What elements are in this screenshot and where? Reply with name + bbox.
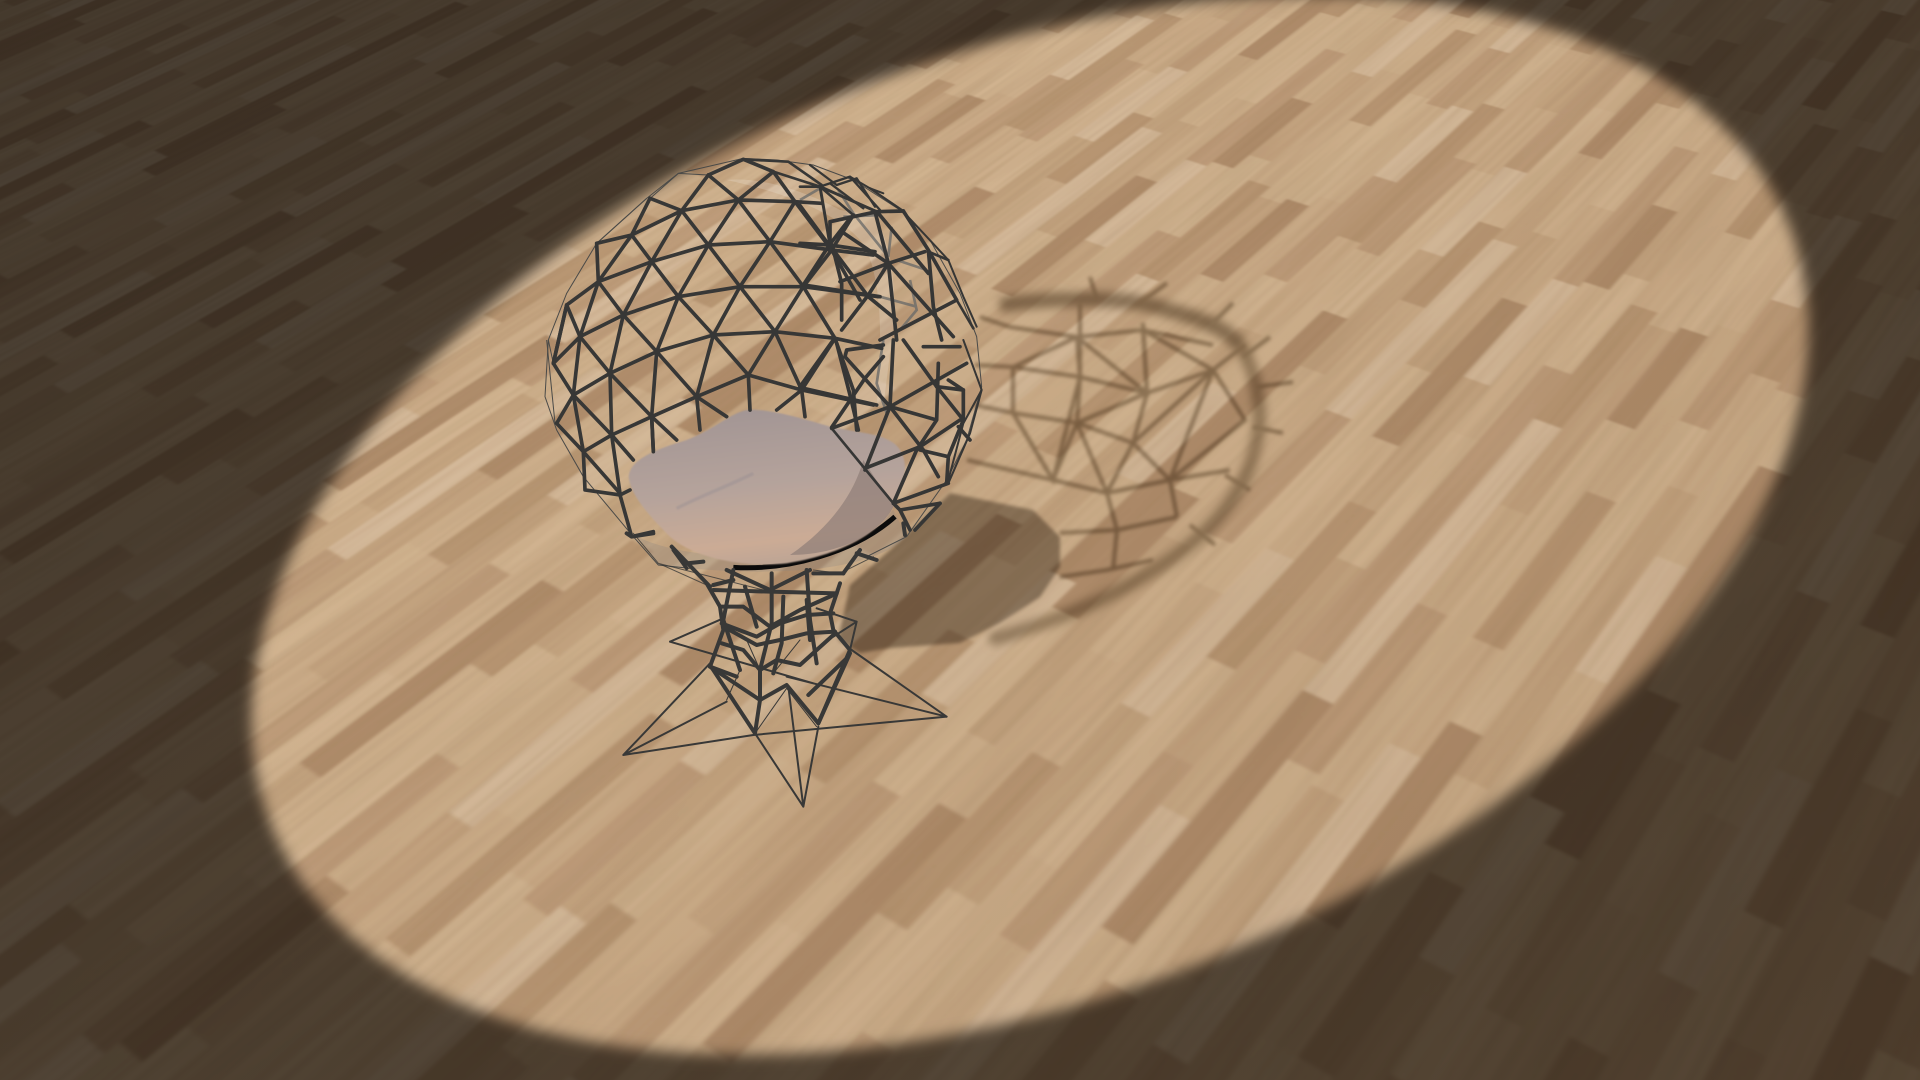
shadow ring	[990, 299, 1259, 640]
sphere thin outline	[545, 158, 982, 568]
shadow net	[967, 277, 1293, 577]
pedestal and star base	[623, 523, 947, 807]
sphere right mesh lower	[800, 340, 982, 530]
sphere grey back struts	[800, 188, 927, 413]
sphere front mesh	[553, 159, 882, 568]
cushion	[629, 410, 905, 568]
sphere back mesh and glass	[637, 179, 907, 572]
cushion shadow	[838, 493, 1060, 653]
sphere right mesh upper	[800, 165, 977, 340]
